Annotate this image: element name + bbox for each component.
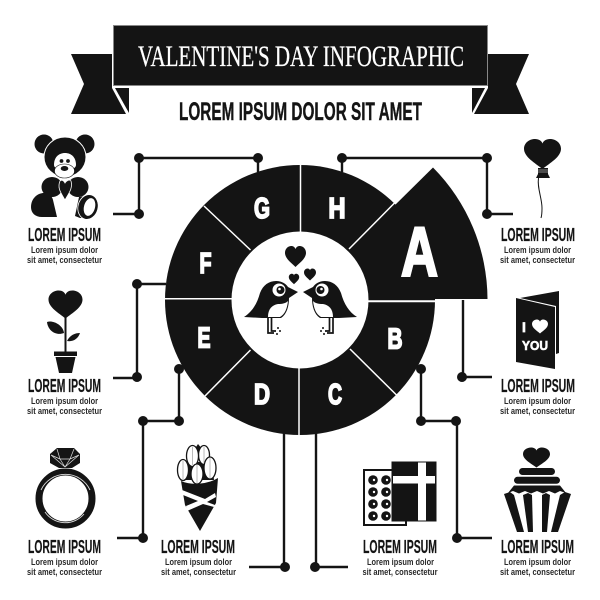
banner left fold <box>115 88 129 113</box>
icon: gift box and chocolates <box>364 462 436 525</box>
icon: I love you card: YOU <box>522 338 548 353</box>
label: ring <box>27 537 102 577</box>
label: balloon: sit amet, consectetur <box>500 255 575 265</box>
icon: diamond ring <box>39 448 92 525</box>
label: balloon: Lorem ipsum dolor <box>504 245 571 255</box>
segment letter E: E <box>198 322 210 354</box>
wheel inner hole <box>232 232 368 368</box>
icon: cupcake with heart <box>504 448 571 532</box>
icon: I love you card <box>516 291 559 369</box>
segment letter D: D <box>254 379 270 411</box>
connectors <box>113 153 513 572</box>
label: gift box: Lorem ipsum dolor <box>367 557 434 567</box>
segment letter H: H <box>328 193 346 225</box>
label: balloon <box>500 225 575 265</box>
banner right fold <box>472 88 485 113</box>
icon: I love you card: I <box>522 319 526 335</box>
icon: heart balloon <box>524 139 561 218</box>
label: bouquet: LOREM IPSUM <box>161 537 235 557</box>
label: ring: Lorem ipsum dolor <box>31 557 98 567</box>
segment letter C: C <box>328 379 342 411</box>
label: cupcake: Lorem ipsum dolor <box>504 557 571 567</box>
label: bouquet: sit amet, consectetur <box>161 567 236 577</box>
title banner <box>71 26 529 114</box>
left bird <box>244 281 298 335</box>
highlighted segment A <box>300 168 488 299</box>
banner body <box>114 26 488 86</box>
label: teddy bear: LOREM IPSUM <box>28 225 101 245</box>
icon: heart flower in pot <box>47 290 82 373</box>
right bird <box>303 281 357 335</box>
banner left tail <box>71 54 126 114</box>
label: cupcake <box>500 537 575 577</box>
segment letter F: F <box>200 248 212 280</box>
wheel ring <box>165 165 435 435</box>
label: heart flower: Lorem ipsum dolor <box>31 396 98 406</box>
label: ring: LOREM IPSUM <box>28 537 101 557</box>
label: gift box <box>362 537 438 577</box>
label: card: sit amet, consectetur <box>500 406 575 416</box>
label: ring: sit amet, consectetur <box>27 567 102 577</box>
label: heart flower: LOREM IPSUM <box>28 376 101 396</box>
icon: tulip bouquet <box>178 444 218 531</box>
subtitle: LOREM IPSUM DOLOR SIT AMET <box>179 98 422 126</box>
banner right tail <box>474 54 529 114</box>
label: teddy bear: sit amet, consectetur <box>27 255 102 265</box>
label: heart flower <box>27 376 102 416</box>
label: cupcake: sit amet, consectetur <box>500 567 575 577</box>
segmented wheel <box>164 165 488 435</box>
label: card <box>500 376 575 416</box>
label: bouquet: Lorem ipsum dolor <box>165 557 232 567</box>
segment letter G: G <box>254 193 270 225</box>
label: gift box: sit amet, consectetur <box>362 567 438 577</box>
label: gift box: LOREM IPSUM <box>363 537 437 557</box>
label: card: Lorem ipsum dolor <box>504 396 571 406</box>
title text: VALENTINE'S DAY INFOGRAPHIC <box>138 40 464 73</box>
label: bouquet <box>161 537 236 577</box>
segment letter A: A <box>401 213 438 291</box>
label: teddy bear: Lorem ipsum dolor <box>31 245 98 255</box>
label: heart flower: sit amet, consectetur <box>27 406 102 416</box>
icon: teddy bear <box>31 134 101 222</box>
icon: love birds with hearts <box>244 246 357 335</box>
label: teddy bear <box>27 225 102 265</box>
segment letter B: B <box>388 324 402 356</box>
